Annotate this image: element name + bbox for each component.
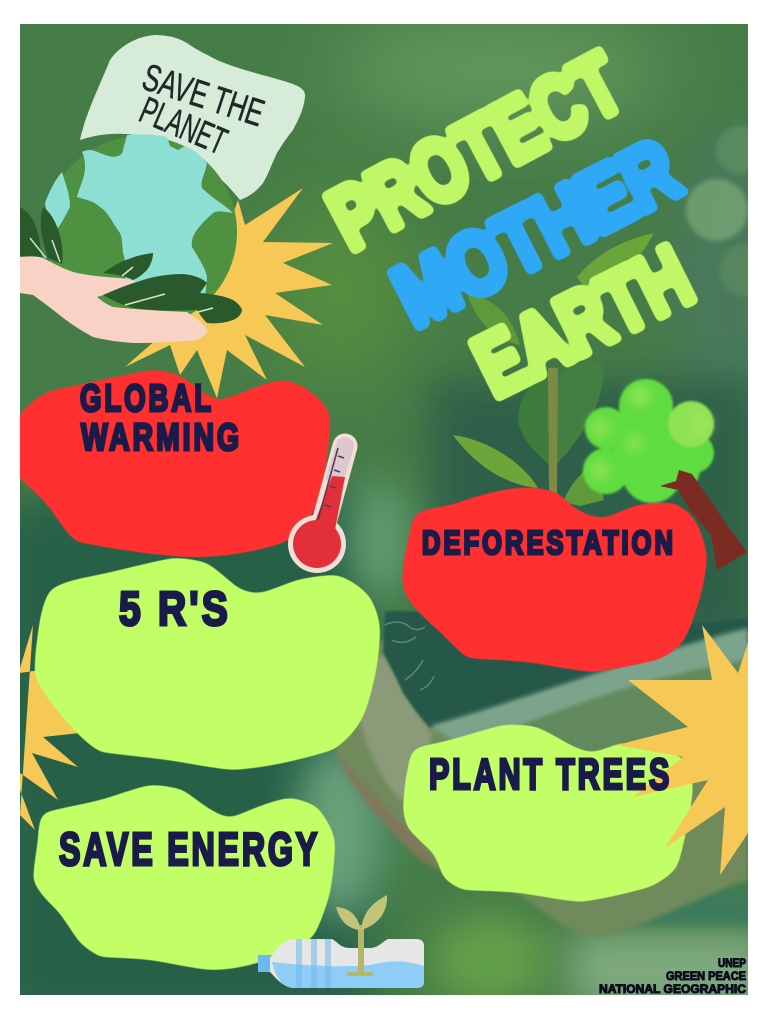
icon: sun burst top left (125, 188, 333, 398)
credits text: GREEN PEACE (666, 971, 746, 983)
title: Protect Mother Earth (322, 46, 698, 402)
panel: global warming blob (16, 370, 330, 557)
heading: global warming: GLOBAL (80, 378, 214, 420)
credits text: NATIONAL GEOGRAPHIC (599, 984, 746, 996)
panel: deforestation blob (402, 488, 707, 672)
icon: sun burst right (617, 625, 748, 875)
title: Protect Mother Earth: EARTH (458, 226, 707, 416)
heading: global warming: WARMING (81, 417, 242, 459)
soil speckle (385, 622, 434, 690)
icon: bottle with sprout (258, 895, 424, 988)
icon: earth globe (45, 134, 237, 328)
title: Protect Mother Earth: MOTHER (378, 119, 694, 346)
background: hand holding soil (335, 611, 748, 937)
panel: save energy blob (33, 785, 335, 970)
panel: plant trees blob (403, 725, 693, 902)
banner text: SAVE THE (137, 57, 269, 135)
icon: thermometer (288, 446, 346, 573)
credits text: UNEP (718, 958, 746, 970)
heading: global warming (80, 383, 238, 452)
icon: tree (583, 379, 747, 570)
credits text (599, 958, 746, 996)
heading: deforestation: DEFORESTATION (422, 524, 676, 561)
banner text (138, 64, 266, 154)
icon: sun burst left edge (20, 625, 80, 830)
icon: save the planet banner (80, 35, 305, 200)
heading: 5 R's: 5 R'S (119, 583, 231, 636)
heading: save energy: SAVE ENERGY (59, 823, 320, 875)
banner text: PLANET (133, 90, 233, 163)
seedling plant (453, 233, 654, 506)
icon: hand with leaves (20, 207, 242, 343)
panel: 5 R's blob (35, 558, 380, 770)
